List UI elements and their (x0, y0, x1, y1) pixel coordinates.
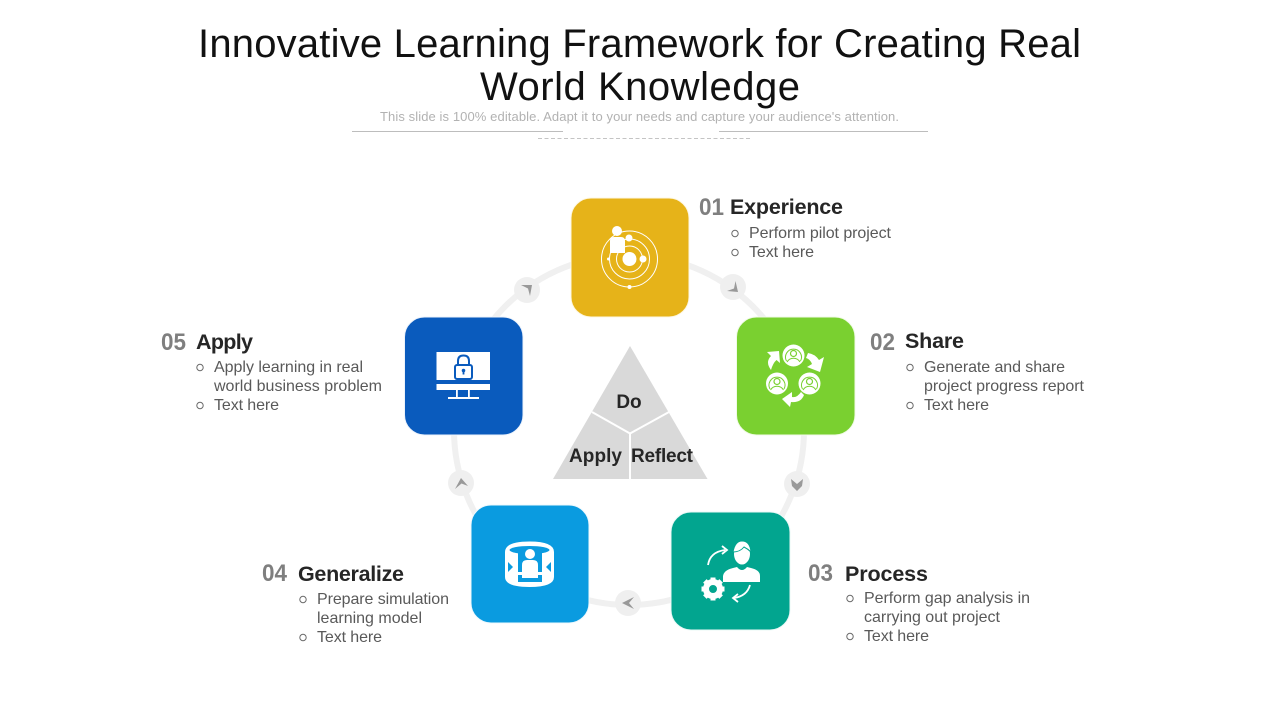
text block: 01 experience: Text here (749, 244, 814, 261)
ring connecting the steps (454, 255, 804, 605)
text block: 02 share: Generate and share (924, 359, 1065, 376)
text block: 01 experience: 01 (699, 194, 724, 221)
arrow node: apply to experience (514, 277, 540, 303)
text block: 04 generalize: learning model (317, 610, 422, 627)
arrow node: share to process (784, 471, 810, 497)
text block: 05 apply (161, 329, 382, 414)
icon: people sharing cycle (766, 344, 824, 407)
text block: 05 apply: 05 (161, 329, 186, 356)
arrow node: experience to share (720, 274, 746, 300)
panel: experience tile (571, 198, 689, 317)
text block: 02 share: Text here (924, 397, 989, 414)
central triangle: do, apply, reflect (553, 346, 708, 479)
icon: simulation cylinder with person (505, 542, 554, 587)
central triangle: do, apply, reflect: Do (616, 392, 642, 413)
text block: 04 generalize: Prepare simulation (317, 591, 449, 608)
text block: 04 generalize: 04 (262, 560, 288, 587)
title: World Knowledge (480, 65, 800, 109)
panel: process tile (671, 512, 790, 630)
title: Innovative Learning Framework for Creating Real (198, 22, 1081, 66)
panel: apply tile (404, 317, 523, 435)
text block: 03 process: Perform gap analysis in (864, 590, 1030, 607)
text block: 05 apply: Apply (196, 330, 253, 354)
panel: share tile (736, 317, 855, 435)
text block: 05 apply: Apply learning in real (214, 359, 363, 376)
panel: generalize tile (471, 505, 589, 623)
text block: 01 experience (699, 194, 892, 261)
arrow node: generalize to apply (448, 470, 474, 496)
text block: 03 process: Text here (864, 628, 929, 645)
text block: 01 experience: Experience (730, 195, 843, 219)
arrow node: process to generalize (615, 590, 641, 616)
icon: monitor with padlock (436, 352, 490, 399)
text block: 02 share: project progress report (924, 378, 1085, 395)
text block: 05 apply: Text here (214, 397, 279, 414)
text block: 01 experience: Perform pilot project (749, 225, 892, 242)
text block: 05 apply: world business problem (213, 378, 382, 395)
central triangle: do, apply, reflect: Apply (569, 446, 622, 467)
subtitle: This slide is 100% editable. Adapt it to your needs and capture your audience's attention. (380, 109, 899, 124)
text block: 02 share: 02 (870, 329, 895, 356)
text block: 03 process: Process (845, 562, 928, 586)
text block: 03 process: carrying out project (864, 609, 1001, 626)
icon: person with orbit (602, 226, 658, 289)
icon: person with gear and arrows (697, 541, 760, 605)
text block: 03 process (808, 560, 1030, 645)
text block: 02 share (870, 329, 1085, 414)
text block: 04 generalize (262, 560, 449, 646)
text block: 03 process: 03 (808, 560, 833, 587)
title (198, 22, 1081, 109)
text block: 04 generalize: Generalize (298, 562, 404, 586)
central triangle: do, apply, reflect: Reflect (631, 446, 694, 467)
text block: 04 generalize: Text here (317, 629, 382, 646)
text block: 02 share: Share (905, 329, 964, 353)
